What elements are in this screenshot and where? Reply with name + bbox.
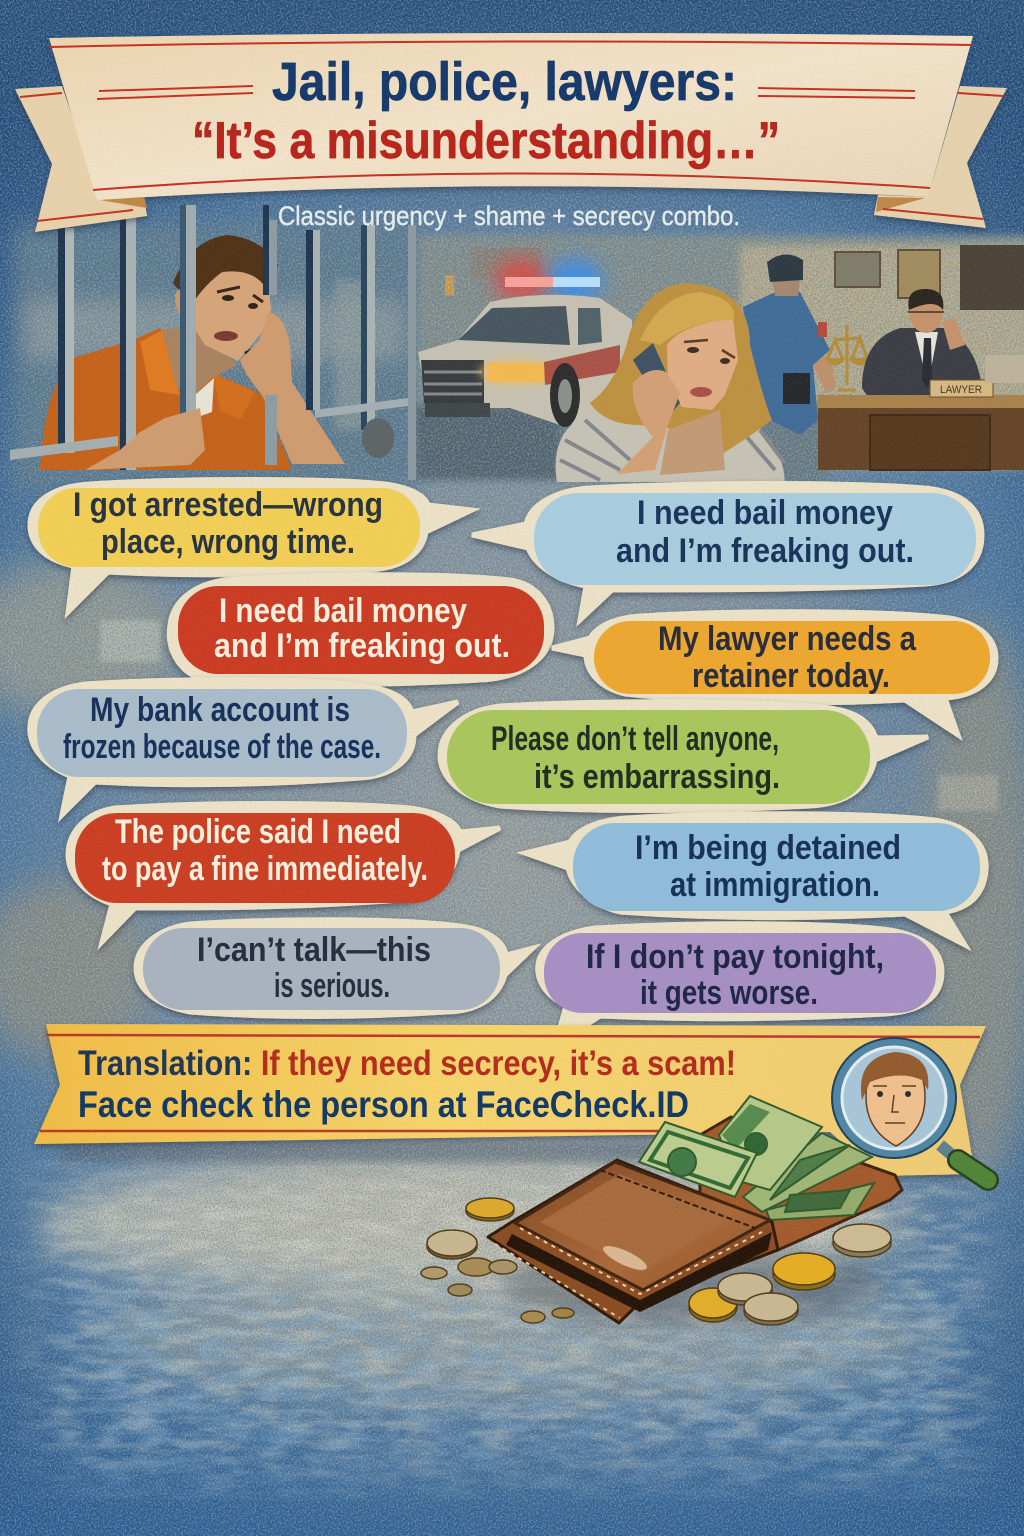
bubble: wrong place: I got arrested—wrong xyxy=(73,486,383,524)
wallet back xyxy=(700,1117,902,1260)
icon: wallet with cash and coins xyxy=(421,1096,902,1325)
bubble: bail money blue xyxy=(472,484,982,620)
callout text line 2: Face check the person at FaceCheck.ID xyxy=(78,1084,689,1125)
panel: scene figures xyxy=(10,205,1024,482)
title line 2: “It’s a misunderstanding…” xyxy=(192,112,780,170)
icon: man in orange jumpsuit on phone xyxy=(40,235,345,470)
title ribbon xyxy=(15,33,1007,232)
bubble: police fine xyxy=(68,804,500,942)
title decoration lines xyxy=(20,41,1003,221)
bubble: bail money red: I need bail money xyxy=(219,592,467,630)
bubble: bank account frozen: My bank account is xyxy=(90,691,350,729)
ribbon folds xyxy=(100,197,925,212)
jail bars xyxy=(10,205,416,480)
wall pictures xyxy=(835,245,1024,310)
bubble: bail money red: and I’m freaking out. xyxy=(214,627,510,665)
scene backdrop: jail and station xyxy=(15,225,1024,490)
icon: scales of justice xyxy=(826,325,869,390)
bubble: embarrassing xyxy=(440,702,928,810)
ribbon main panel xyxy=(49,33,973,200)
bubble: gets worse xyxy=(538,924,942,1045)
icon: magnifying glass with face xyxy=(832,1038,988,1180)
desk with lawyer nameplate xyxy=(818,355,1024,470)
bubble: serious: I’can’t talk—this xyxy=(197,931,431,969)
callout banner xyxy=(34,1024,986,1176)
bubble: immigration: I’m being detained xyxy=(635,829,901,867)
bubble: bail money red xyxy=(169,575,552,684)
ribbon tail: left xyxy=(15,86,147,232)
subtitle: Classic urgency + shame + secrecy combo. xyxy=(278,201,740,231)
bubble: gets worse: If I don’t pay tonight, xyxy=(586,938,884,976)
cash bills xyxy=(639,1096,874,1220)
coins xyxy=(421,1198,891,1325)
jail cell wall xyxy=(15,225,420,490)
ribbon tail: right xyxy=(874,86,1007,228)
bubble: immigration xyxy=(525,814,986,945)
icon: blonde woman on phone xyxy=(556,283,785,482)
bubble: immigration: at immigration. xyxy=(670,866,880,904)
icon: lawyer xyxy=(862,289,982,400)
bubble: serious: is serious. xyxy=(274,967,390,1005)
icon: police car xyxy=(418,258,632,427)
police station wall xyxy=(415,235,1024,480)
bubble: embarrassing: it’s embarrassing. xyxy=(534,758,780,796)
bubble: bail money blue: I need bail money xyxy=(637,494,893,532)
bubble: embarrassing: Please don’t tell anyone, xyxy=(491,720,779,758)
bubble: police fine: The police said I need xyxy=(115,813,401,851)
bubble: police fine: to pay a fine immediately. xyxy=(102,850,428,888)
bubble: wrong place xyxy=(30,480,472,612)
desk with lawyer nameplate: LAWYER xyxy=(940,384,982,396)
icon: police officer xyxy=(743,254,836,435)
bubble: lawyer retainer: retainer today. xyxy=(692,657,890,695)
wallet front flap xyxy=(488,1160,778,1323)
bubble: gets worse: it gets worse. xyxy=(640,974,818,1012)
bubble: bank account frozen xyxy=(30,680,458,815)
hand gripping bar xyxy=(85,408,205,470)
bubble: bail money blue: and I’m freaking out. xyxy=(616,532,914,570)
bubble: lawyer retainer xyxy=(552,612,996,735)
bubble: serious xyxy=(136,920,533,1016)
bubble: bank account frozen: frozen because of the case. xyxy=(63,728,381,766)
bubble: lawyer retainer: My lawyer needs a xyxy=(658,620,917,658)
panel: speech bubbles xyxy=(30,480,996,1045)
bubble: wrong place: place, wrong time. xyxy=(101,523,355,561)
callout text line 1: Translation: If they need secrecy, it’s a scam! xyxy=(78,1044,736,1083)
title line 1: Jail, police, lawyers: xyxy=(272,52,737,112)
